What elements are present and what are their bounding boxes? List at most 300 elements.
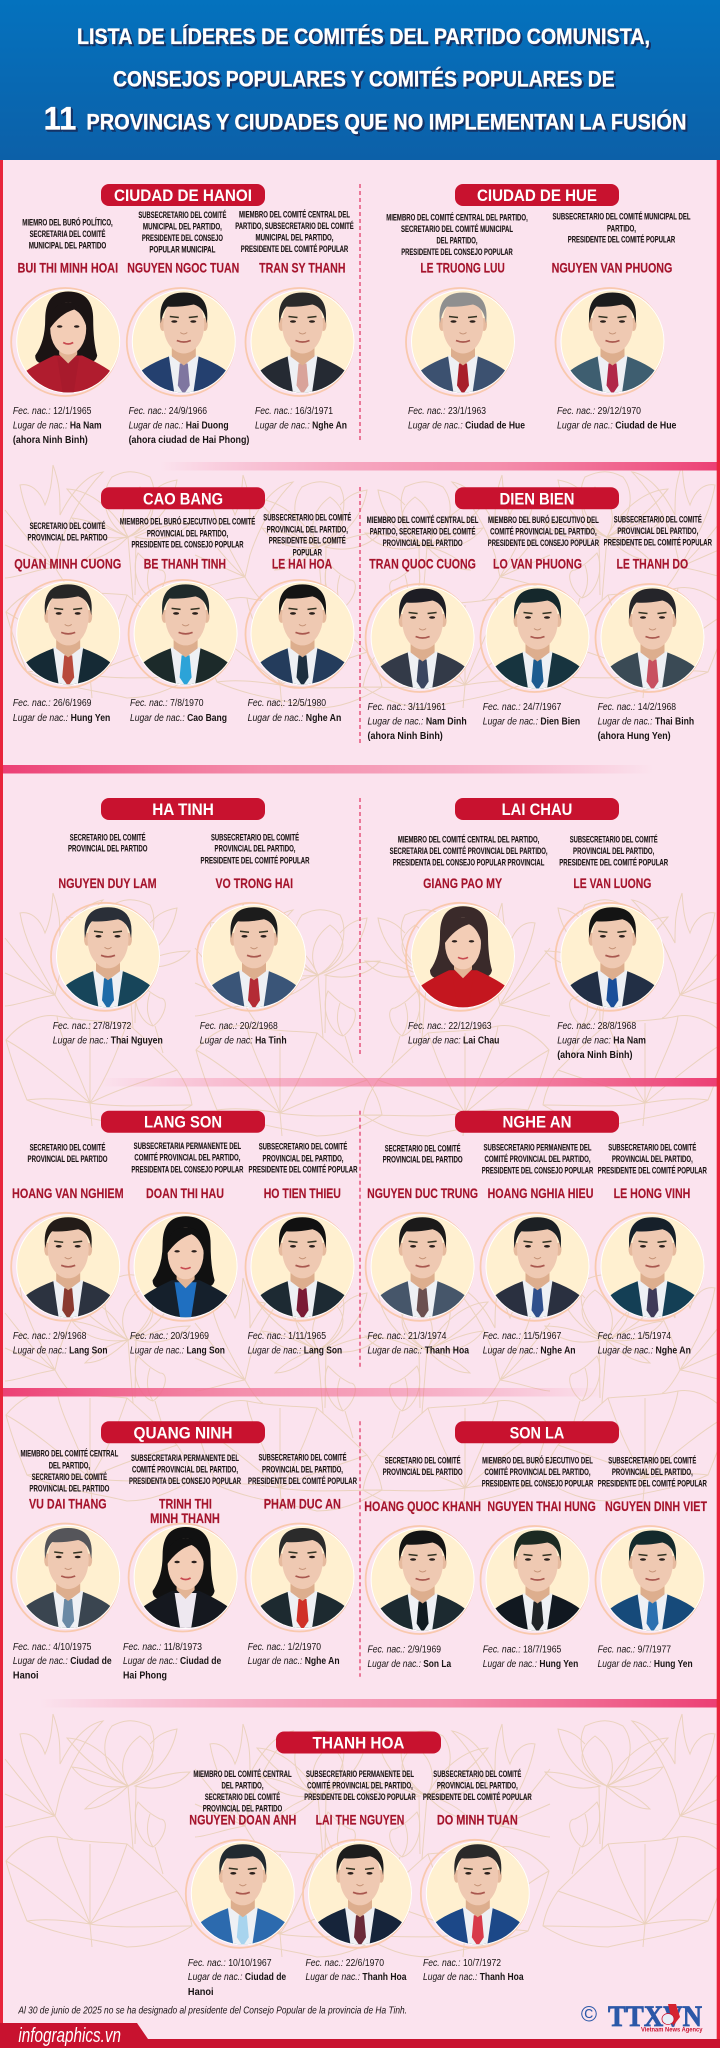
portrait <box>127 288 236 402</box>
heading pill: Son La <box>455 1421 619 1443</box>
heading pill: Son La: SON LA <box>510 1423 564 1442</box>
bio: Lugar de nac: Ha Nam <box>557 1036 646 1046</box>
role: PRESIDENTE DEL CONSEJO POPULAR <box>488 538 599 548</box>
role: SUBSECRETARIO DEL COMITÉ <box>138 210 226 220</box>
leader: Le Hai Hoa <box>246 513 354 724</box>
heading pill: Lai Chau: LAI CHAU <box>502 800 572 819</box>
role <box>552 212 691 245</box>
role <box>383 1143 463 1165</box>
bio: Fec. nac.: 1/5/1974 <box>598 1331 671 1342</box>
role: PROVINCIAL DEL PARTIDO, <box>262 1464 343 1474</box>
role: PROVINCIAL DEL PARTIDO <box>68 844 147 854</box>
role <box>235 209 354 254</box>
name: BUI THI MINH HOAI <box>18 260 118 276</box>
role: MUNICIPAL DEL PARTIDO <box>29 240 106 250</box>
role: PRESIDENTA DEL CONSEJO POPULAR PROVINCIAL <box>393 858 545 868</box>
role: PRESIDENTE DEL COMITÉ POPULAR <box>201 855 310 865</box>
portrait <box>555 903 664 1016</box>
role: PROVINCIAL DEL PARTIDO, <box>573 846 654 856</box>
bio: Fec. nac.: 20/3/1969 <box>130 1331 209 1342</box>
role: MUNICIPAL DEL PARTIDO, <box>143 222 222 232</box>
portrait <box>51 903 160 1016</box>
portrait <box>11 288 120 402</box>
bio: Fec. nac.: 2/9/1969 <box>368 1644 441 1656</box>
panel: Ciudad de Hanoi <box>11 184 354 446</box>
bio: Lugar de nac.: Nghe An <box>255 420 347 432</box>
portrait <box>366 1526 475 1640</box>
role: COMITÉ PROVINCIAL DEL PARTIDO, <box>132 1464 238 1474</box>
name: DOAN THI HAU <box>146 1185 224 1201</box>
leader: Do Minh Tuan <box>421 1769 532 1983</box>
bio: Fec. nac.: 24/9/1966 <box>129 406 207 417</box>
bio: Lugar de nac.: Nghe An <box>483 1346 576 1356</box>
role: PRESIDENTE DEL COMITÉ POPULAR <box>559 858 668 868</box>
portrait <box>129 580 238 693</box>
role: PRESIDENTE DEL COMITÉ <box>269 536 346 546</box>
bio: Lugar de nac: Lai Chau <box>408 1036 499 1046</box>
bio: (ahora Ninh Binh) <box>13 435 88 446</box>
role: PROVINCIAL DEL PARTIDO, <box>215 844 295 854</box>
leader: Trinh Thi Minh Thanh <box>123 1453 241 1682</box>
portrait <box>421 1840 530 1953</box>
portrait <box>480 1526 590 1640</box>
bio: Lugar de nac.: Cao Bang <box>130 713 227 724</box>
heading pill: Dien Bien: DIEN BIEN <box>500 489 574 508</box>
bio: Fec. nac.: 12/1/1965 <box>13 406 92 417</box>
role: POPULAR <box>293 547 322 557</box>
role <box>28 521 108 543</box>
panel: Son La <box>364 1421 707 1670</box>
leader: Be Thanh Tinh <box>120 516 255 724</box>
leader: Le Hong Vinh <box>596 1142 707 1356</box>
role: PRESIDENTE DEL CONSEJO POPULAR <box>401 247 513 257</box>
bio: Fec. nac.: 28/8/1968 <box>557 1021 637 1032</box>
name: VU DAI THANG <box>29 1496 107 1512</box>
bio: Fec. nac.: 1/2/1970 <box>248 1642 321 1653</box>
footer bar with site name: infographics.vn <box>18 2025 121 2047</box>
bio: Lugar de nac.: Thanh Hoa <box>368 1346 469 1356</box>
bio: Fec. nac.: 16/3/1971 <box>255 406 333 417</box>
name: LO VAN PHUONG <box>493 556 582 572</box>
bio: Lugar de nac.: Nghe An <box>598 1346 691 1356</box>
title <box>44 24 686 136</box>
role: PROVINCIAL DEL PARTIDO <box>383 1467 463 1477</box>
role: POPULAR MUNICIPAL <box>149 245 216 255</box>
bio: Lugar de nac.: Lang Son <box>13 1346 107 1356</box>
panel: Quang Ninh <box>11 1421 357 1682</box>
role: PRESIDENTA DEL CONSEJO POPULAR <box>129 1476 241 1486</box>
role: MIEMBRO DEL COMITÉ CENTRAL DEL <box>367 515 479 525</box>
role: PROVINCIAL DEL PARTIDO <box>28 1154 108 1164</box>
panel: Thanh Hoa <box>186 1732 532 1998</box>
role: SECRETARIO DEL COMITÉ <box>30 521 105 531</box>
role: DEL PARTIDO, <box>436 236 478 246</box>
leader: Nguyen Duc Trung <box>366 1143 478 1356</box>
bio: Lugar de nac.: Nghe An <box>248 713 341 724</box>
role <box>249 1142 358 1175</box>
portrait <box>366 584 475 698</box>
heading pill: Ciudad de Hue: CIUDAD DE HUE <box>477 186 597 205</box>
portrait <box>129 1213 238 1326</box>
bio <box>13 1331 107 1356</box>
role: PRESIDENTE DEL COMITÉ POPULAR <box>423 1792 532 1802</box>
name: GIANG PAO MY <box>423 875 503 891</box>
role: PROVINCIAL DEL PARTIDO, <box>437 1780 518 1790</box>
role: MIEMBRO DEL COMITÉ CENTRAL <box>193 1769 292 1779</box>
role: PRESIDENTE DEL COMITÉ POPULAR <box>249 1165 358 1175</box>
bio: Lugar de nac.: Nghe An <box>248 1656 340 1667</box>
name: VO TRONG HAI <box>216 875 293 891</box>
portrait <box>480 1213 590 1326</box>
portrait <box>246 1213 354 1326</box>
panel: Cao Bang <box>11 487 354 724</box>
role <box>482 1142 594 1176</box>
footer bar with site name <box>0 2023 720 2048</box>
panel: Dien Bien <box>366 487 712 742</box>
role: SUBSECRETARIO PERMANENTE DEL <box>306 1769 414 1779</box>
heading pill: Quang Ninh: QUANG NINH <box>134 1423 232 1442</box>
portrait <box>406 288 515 402</box>
role: MUNICIPAL DEL PARTIDO, <box>256 233 334 243</box>
heading pill: Nghe An: NGHE AN <box>502 1113 572 1132</box>
role: COMITÉ PROVINCIAL DEL PARTIDO, <box>490 527 597 537</box>
name: NGUYEN NGOC TUAN <box>127 260 239 276</box>
leader: Nguyen Dinh Viet <box>596 1455 707 1670</box>
title: LISTA DE LÍDERES DE COMITÉS DEL PARTIDO COMUNISTA, <box>77 24 650 49</box>
role <box>28 1142 108 1164</box>
portrait <box>129 1524 238 1637</box>
heading pill: Lang Son <box>101 1111 265 1133</box>
portrait <box>186 1840 295 1953</box>
bio: (ahora Ninh Binh) <box>557 1050 632 1061</box>
bio: Fec. nac.: 14/2/1968 <box>598 702 676 713</box>
bio: Lugar de nac.: Son La <box>368 1659 451 1670</box>
bio: Fec. nac.: 22/12/1963 <box>408 1021 492 1032</box>
bio <box>483 1331 576 1356</box>
role: COMITÉ PROVINCIAL DEL PARTIDO, <box>307 1780 413 1790</box>
leader: Nguyen Thai Hung <box>480 1454 596 1670</box>
role: MIEMBRO DEL BURÓ EJECUTIVO DEL <box>482 1454 593 1465</box>
bio <box>53 1021 163 1046</box>
portrait <box>11 1524 120 1637</box>
bio: Fec. nac.: 10/7/1972 <box>423 1958 501 1969</box>
leader: Quan Minh Cuong <box>11 521 121 724</box>
role: COMITÉ PROVINCIAL DEL PARTIDO, <box>134 1153 240 1163</box>
role <box>367 515 479 548</box>
heading pill: Lang Son: LANG SON <box>144 1113 222 1132</box>
role <box>386 212 528 257</box>
footnote: Al 30 de junio de 2025 no se ha designado al presidente del Consejo Popular de la provincia de Ha Tinh. <box>18 2004 407 2016</box>
role <box>598 1142 707 1176</box>
bio: Fec. nac.: 11/8/1973 <box>123 1642 202 1653</box>
bio: (ahora Hung Yen) <box>598 731 671 742</box>
role: SECRETARIO DEL COMITÉ <box>385 1455 460 1465</box>
name: QUAN MINH CUONG <box>14 556 121 572</box>
bio: Fec. nac.: 22/6/1970 <box>306 1958 384 1969</box>
bio: Lugar de nac.: Lang Son <box>248 1346 342 1356</box>
role: PROVINCIAL DEL PARTIDO <box>29 1483 109 1493</box>
portrait <box>246 580 354 693</box>
role <box>383 1455 463 1477</box>
role: SECRETARIA DEL COMITÉ <box>30 229 105 239</box>
role: SECRETARIA DEL COMITÉ PROVINCIAL DEL PARTIDO, <box>390 846 548 856</box>
role: SUBSECRETARIO DEL COMITÉ <box>258 1453 346 1463</box>
bio <box>557 406 677 432</box>
role: PROVINCIAL DEL PARTIDO <box>383 1155 463 1165</box>
bio <box>248 1642 340 1667</box>
leader: Ho Tien Thieu <box>246 1142 358 1356</box>
leader: Nguyen Duy Lam <box>51 832 163 1046</box>
bio: Fec. nac.: 3/11/1961 <box>368 702 446 713</box>
portrait <box>406 903 515 1016</box>
header banner <box>0 0 720 160</box>
bio: Fec. nac.: 10/10/1967 <box>188 1958 272 1969</box>
name: TRINH THI <box>159 1496 212 1512</box>
leader: Pham Duc An <box>246 1453 357 1667</box>
bio: Fec. nac.: 24/7/1967 <box>483 702 562 713</box>
role: SUBSECRETARIO DEL COMITÉ <box>263 513 351 523</box>
bio: Fec. nac.: 4/10/1975 <box>13 1642 92 1653</box>
bio: Lugar de nac.: Ciudad de <box>123 1656 222 1667</box>
bio: Fec. nac.: 21/3/1974 <box>368 1331 447 1342</box>
role: SUBSECRETARIA PERMANENTE DEL <box>134 1141 241 1151</box>
role: SECRETARIO DEL COMITÉ <box>385 1143 460 1153</box>
name: HOANG NGHIA HIEU <box>488 1185 594 1201</box>
bio: (ahora ciudad de Hai Phong) <box>129 435 249 446</box>
bio: Hanoi <box>188 1987 214 1998</box>
bio <box>368 702 467 742</box>
bio: Fec. nac.: 7/8/1970 <box>130 698 204 709</box>
panel: Ha Tinh <box>51 798 310 1046</box>
logo: TTXVN Vietnam News Agency: © <box>581 2002 597 2026</box>
bio: Lugar de nac: Ha Tinh <box>200 1036 287 1046</box>
role: MIEMBRO DEL BURÓ EJECUTIVO DEL <box>488 514 599 525</box>
portrait <box>246 1524 354 1637</box>
leader: Vo Trong Hai <box>197 832 310 1046</box>
role <box>22 216 113 250</box>
bio: Lugar de nac.: Hai Duong <box>129 420 229 432</box>
role: PRESIDENTE DEL COMITÉ POPULAR <box>248 1476 357 1486</box>
portrait <box>303 1840 412 1953</box>
role: PRESIDENTE DEL CONSEJO <box>142 233 223 243</box>
bio: Fec. nac.: 23/1/1963 <box>408 406 486 417</box>
panel: Ciudad de Hue <box>386 184 691 432</box>
bio: Lugar de nac.: Ciudad de <box>188 1972 287 1983</box>
bio: Lugar de nac.: Dien Bien <box>483 716 580 728</box>
name: HOANG QUOC KHANH <box>364 1498 481 1514</box>
name: NGUYEN VAN PHUONG <box>552 260 672 276</box>
role: MIEMBRO DEL COMITÉ CENTRAL DEL PARTIDO, <box>386 212 528 222</box>
bio <box>423 1958 524 1983</box>
name: NGUYEN DOAN ANH <box>189 1812 296 1828</box>
leader: Le Truong Luu <box>386 212 528 432</box>
heading pill: Cao Bang <box>101 487 265 509</box>
role <box>138 210 226 255</box>
role <box>248 1453 357 1486</box>
bio: Lugar de nac.: Hung Yen <box>483 1659 578 1670</box>
bio: Lugar de nac.: Thai Binh <box>598 716 694 728</box>
portrait <box>596 584 704 698</box>
title: 11 <box>44 100 76 136</box>
name <box>150 1496 220 1526</box>
role: MIEMBRO DEL COMITÉ CENTRAL <box>20 1449 119 1459</box>
role: MIEMBRO DEL BURÓ EJECUTIVO DEL COMITÉ <box>120 516 255 527</box>
leader: Hoang Van Nghiem <box>11 1142 124 1356</box>
bio: Lugar de nac.: Ciudad de <box>13 1656 112 1667</box>
name: LE VAN LUONG <box>573 875 651 891</box>
bio <box>188 1958 287 1998</box>
role <box>390 834 548 868</box>
role: COMITÉ PROVINCIAL DEL PARTIDO, <box>484 1467 590 1477</box>
heading pill: Dien Bien <box>455 487 619 509</box>
bio <box>408 1021 499 1046</box>
portrait <box>556 288 664 402</box>
role: SECRETARIO DEL COMITÉ <box>30 1142 105 1152</box>
portrait <box>596 1526 704 1640</box>
role: SUBSECRETARIA PERMANENTE DEL <box>131 1453 239 1463</box>
bio <box>306 1958 407 1983</box>
bio: Fec. nac.: 18/7/1965 <box>483 1644 562 1656</box>
leader: Bui Thi Minh Hoai <box>11 216 120 446</box>
role <box>482 1454 594 1489</box>
heading pill: Cao Bang: CAO BANG <box>143 489 223 508</box>
name: NGUYEN DUY LAM <box>58 875 157 891</box>
role: SECRETARIO DEL COMITÉ <box>205 1792 280 1802</box>
leader: Vu Dai Thang <box>11 1449 120 1682</box>
heading pill: Thanh Hoa <box>276 1732 441 1754</box>
bio: Lugar de nac.: Thanh Hoa <box>306 1972 407 1983</box>
name: LE HONG VINH <box>614 1185 690 1201</box>
bio: Fec. nac.: 29/12/1970 <box>557 406 641 417</box>
leader: Doan Thi Hau <box>129 1141 244 1356</box>
role: SECRETARIO DEL COMITÉ <box>70 832 146 842</box>
role: PARTIDO, <box>607 223 636 233</box>
bio <box>13 1642 112 1682</box>
bio <box>13 698 110 724</box>
leader: Tran Quoc Cuong <box>366 515 479 742</box>
bio <box>598 1644 693 1670</box>
bio <box>130 698 227 724</box>
role <box>488 514 599 548</box>
bio <box>408 406 525 432</box>
role: SUBSECRETARIO DEL COMITÉ <box>211 832 299 842</box>
role: SECRETARIO DEL COMITÉ MUNICIPAL <box>401 224 513 234</box>
leader: Le Thanh Do <box>596 514 712 742</box>
bio <box>248 1331 342 1356</box>
role: PRESIDENTE DEL CONSEJO POPULAR <box>482 1479 594 1489</box>
bio <box>130 1331 225 1356</box>
role <box>193 1769 292 1814</box>
panel: Nghe An <box>366 1111 707 1356</box>
bio <box>123 1642 222 1682</box>
name: LAI THE NGUYEN <box>316 1812 404 1828</box>
role: PROVINCIAL DEL PARTIDO, <box>267 524 348 534</box>
role <box>604 514 712 547</box>
role: PRESIDENTE DEL CONSEJO POPULAR <box>304 1792 416 1802</box>
bio <box>200 1021 287 1046</box>
portrait <box>11 1213 120 1326</box>
heading pill: Lai Chau <box>455 798 619 820</box>
role <box>20 1449 119 1493</box>
bio <box>13 406 102 446</box>
bio: Lugar de nac.: Ciudad de Hue <box>557 420 677 432</box>
role: SECRETARIO DEL COMITÉ <box>32 1472 107 1482</box>
name: LE THANH DO <box>616 556 688 572</box>
role: PROVINCIAL DEL PARTIDO, <box>147 528 228 538</box>
portrait <box>366 1213 475 1326</box>
title: CONSEJOS POPULARES Y COMITÉS POPULARES DE <box>113 67 615 92</box>
name: TRAN QUOC CUONG <box>369 556 476 572</box>
bio <box>483 702 580 728</box>
bio: Fec. nac.: 2/9/1968 <box>13 1331 87 1342</box>
bio: Fec. nac.: 11/5/1967 <box>483 1331 562 1342</box>
role: PARTIDO, SUBSECRETARIO DEL COMITÉ <box>235 221 354 231</box>
heading pill: Nghe An <box>455 1111 619 1133</box>
name: PHAM DUC AN <box>264 1496 341 1512</box>
role <box>120 516 255 550</box>
bio: Fec. nac.: 1/11/1965 <box>248 1331 326 1342</box>
bio: Lugar de nac.: Thanh Hoa <box>423 1972 524 1983</box>
name: TRAN SY THANH <box>259 260 345 276</box>
role: SUBSECRETARIO DEL COMITÉ <box>259 1142 347 1152</box>
bio <box>483 1644 578 1670</box>
role <box>559 834 668 868</box>
role <box>129 1453 241 1486</box>
heading pill: Quang Ninh <box>101 1421 265 1443</box>
name: HO TIEN THIEU <box>264 1185 341 1201</box>
leader: Lo Van Phuong <box>480 514 599 728</box>
role <box>68 832 147 854</box>
role <box>263 513 351 557</box>
bio <box>248 698 341 724</box>
panel: Lang Son <box>11 1111 358 1356</box>
bio: Lugar de nac.: Ha Nam <box>13 420 102 432</box>
panel: Lai Chau <box>390 798 668 1061</box>
name: LE TRUONG LUU <box>420 260 505 276</box>
name: MINH THANH <box>150 1510 220 1526</box>
portrait <box>480 584 590 698</box>
logo: TTXVN Vietnam News Agency: Vietnam News Agency <box>641 2028 703 2034</box>
role <box>423 1769 532 1802</box>
role: PARTIDO, SECRETARIO DEL COMITÉ <box>370 527 475 537</box>
portrait <box>596 1213 704 1326</box>
role <box>304 1769 416 1802</box>
role <box>131 1141 244 1174</box>
role: MIEMBRO DEL COMITÉ CENTRAL DEL PARTIDO, <box>398 834 539 844</box>
portrait <box>11 580 120 693</box>
heading pill: Thanh Hoa: THANH HOA <box>312 1734 404 1752</box>
bio: Fec. nac.: 26/6/1969 <box>13 698 92 709</box>
role <box>598 1455 707 1489</box>
leader: Hoang Quoc Khanh <box>364 1455 481 1670</box>
name: NGUYEN THAI HUNG <box>487 1498 596 1514</box>
name: HOANG VAN NGHIEM <box>12 1185 124 1201</box>
bio <box>368 1644 451 1670</box>
role: PROVINCIAL DEL PARTIDO <box>383 538 463 548</box>
leader: Nguyen Ngoc Tuan <box>127 210 249 446</box>
bio <box>557 1021 646 1061</box>
bio: Fec. nac.: 12/5/1980 <box>248 698 326 709</box>
bio: Fec. nac.: 20/2/1968 <box>200 1021 278 1032</box>
bio: Lugar de nac.: Hung Yen <box>13 713 110 724</box>
role: MIEMBRO DEL COMITÉ CENTRAL DEL <box>239 209 350 219</box>
role <box>201 832 310 865</box>
leader: Nguyen Van Phuong <box>552 212 691 432</box>
heading pill: Ciudad de Hanoi: CIUDAD DE HANOI <box>114 186 252 205</box>
role: PROVINCIAL DEL PARTIDO <box>28 533 108 543</box>
logo: TTXVN Vietnam News Agency: TTXVN <box>608 2000 702 2033</box>
name: DO MINH TUAN <box>437 1812 518 1828</box>
